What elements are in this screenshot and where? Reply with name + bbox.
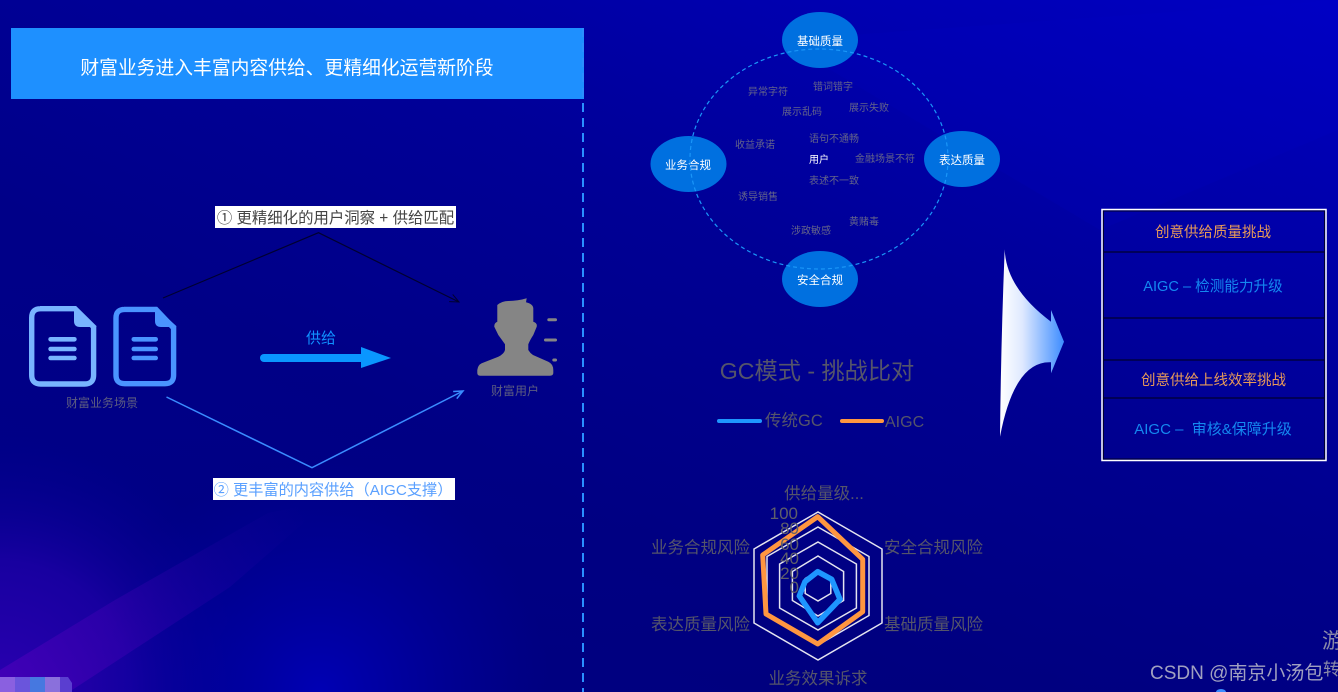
label: supply: 供给 [306, 330, 336, 347]
legend: 传统GC [765, 411, 823, 430]
series: traditional GC [799, 572, 840, 623]
clipped side text [1322, 630, 1338, 679]
label: user: 财富用户 [491, 383, 539, 398]
row: review upgrade: AIGC – 审核&保障升级 [1134, 420, 1292, 438]
icon: document 1 [32, 306, 96, 384]
arrow: to challenges [1000, 249, 1064, 437]
legend: AIGC [885, 414, 924, 431]
bottom clipped mark [1216, 689, 1226, 692]
risk labels: 收益承诺 [735, 138, 775, 151]
axis labels: 业务效果诉求 [768, 669, 868, 688]
axis values [770, 504, 799, 597]
pixelated corner [0, 677, 72, 692]
node: business compliance [650, 136, 726, 192]
icon: document 2 [116, 307, 176, 384]
row: efficiency challenge: 创意供给上线效率挑战 [1141, 371, 1286, 389]
row: quality challenge: 创意供给质量挑战 [1155, 223, 1271, 241]
arrow: supply [260, 347, 391, 368]
watermark: CSDN @南京小汤包 [1150, 662, 1323, 684]
axis values: 20 [780, 564, 799, 583]
risk labels: 异常字符 [748, 85, 788, 98]
node: expression quality: 表达质量 [939, 153, 985, 167]
panel: challenges table [1102, 210, 1326, 460]
diagram: quality circle [650, 12, 1000, 307]
risk labels: 表述不一致 [809, 174, 859, 187]
axis labels: 业务合规风险 [651, 538, 750, 557]
node: business compliance: 业务合规 [665, 158, 711, 172]
chart title: GC模式 - 挑战比对 [720, 358, 914, 384]
risk labels: 错词错字 [813, 80, 853, 93]
axis values: 100 [770, 504, 798, 523]
risk labels: 黄赌毒 [849, 215, 879, 228]
node: basic quality [782, 12, 858, 68]
risk labels: 金融场景不符 [855, 152, 915, 165]
risk labels: 诱导销售 [738, 190, 778, 203]
node: safety compliance: 安全合规 [797, 273, 843, 287]
arrow: top path [163, 233, 459, 302]
axis values: 80 [780, 519, 799, 538]
axis labels: 供给量级... [784, 484, 864, 503]
radar chart [651, 484, 984, 688]
dashed ring [690, 49, 948, 269]
risk labels: 用户 [809, 153, 829, 166]
axis labels: 表达质量风险 [651, 615, 750, 634]
row: detection upgrade: AIGC – 检测能力升级 [1143, 278, 1283, 295]
icon: user [477, 298, 557, 376]
risk labels: 展示失败 [849, 101, 889, 114]
title banner [11, 28, 584, 99]
label: bottom path: ② 更丰富的内容供给（AIGC支撑） [214, 481, 452, 499]
title banner: 财富业务进入丰富内容供给、更精细化运营新阶段 [80, 57, 494, 78]
axis values: 40 [780, 549, 799, 568]
label: scenario: 财富业务场景 [66, 395, 138, 410]
axis labels: 基础质量风险 [884, 615, 984, 634]
node: safety compliance [782, 251, 858, 307]
series: AIGC [763, 517, 863, 644]
node: expression quality [924, 131, 1000, 187]
risk labels [735, 80, 915, 237]
risk labels: 涉政敏感 [791, 224, 831, 237]
legend [717, 411, 924, 431]
risk labels: 语句不通畅 [809, 132, 859, 145]
node: basic quality: 基础质量 [797, 35, 843, 48]
axis labels: 安全合规风险 [884, 538, 984, 557]
arrow: bottom path [166, 391, 463, 468]
axis labels [651, 484, 984, 688]
axis values: 0 [790, 578, 799, 597]
axis values: 60 [780, 535, 799, 554]
label: top path: ① 更精细化的用户洞察 + 供给匹配 [217, 209, 454, 227]
risk labels: 展示乱码 [782, 106, 822, 118]
divider [582, 28, 584, 692]
